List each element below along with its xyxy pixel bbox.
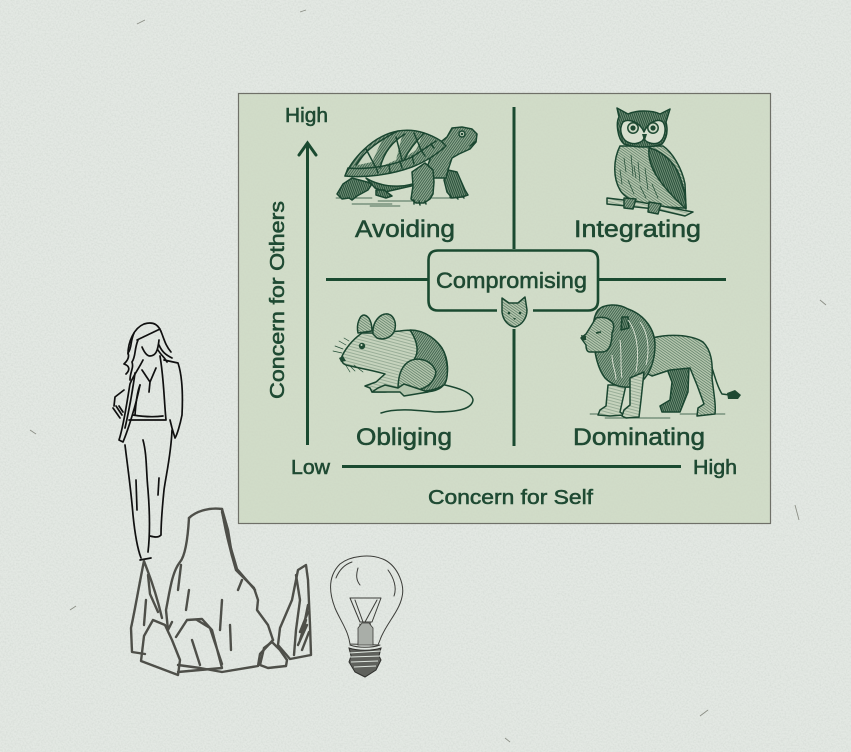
centre divider lines <box>326 107 726 446</box>
heading: dominating: Dominating <box>573 424 705 451</box>
label: low: Low <box>291 457 331 479</box>
panel: conflict styles matrix <box>238 94 770 524</box>
icon: lion <box>581 305 741 418</box>
jacket and torso <box>113 356 182 442</box>
compromising box <box>428 250 598 310</box>
axis title: concern for self: Concern for Self <box>428 486 593 509</box>
heading: integrating: Integrating <box>574 216 701 243</box>
axis title: concern for others: Concern for Others <box>266 201 289 399</box>
heading: obliging: Obliging <box>356 424 452 451</box>
horizontal axis line <box>342 465 681 468</box>
icon: cat face <box>502 297 527 327</box>
hair and face <box>124 323 172 380</box>
trousers <box>125 430 172 560</box>
illustration: rocks <box>131 509 311 675</box>
heading: avoiding: Avoiding <box>355 216 455 243</box>
vertical axis arrow <box>299 143 316 445</box>
label: high concern for others: High <box>285 105 328 127</box>
icon: owl <box>607 108 693 216</box>
icon: turtle <box>336 127 477 206</box>
heading: compromising: Compromising <box>436 268 587 293</box>
illustration: woman walking <box>113 323 182 560</box>
icon: mouse <box>333 314 473 413</box>
icon: light bulb <box>331 556 403 677</box>
label: high concern for self: High <box>693 457 737 479</box>
